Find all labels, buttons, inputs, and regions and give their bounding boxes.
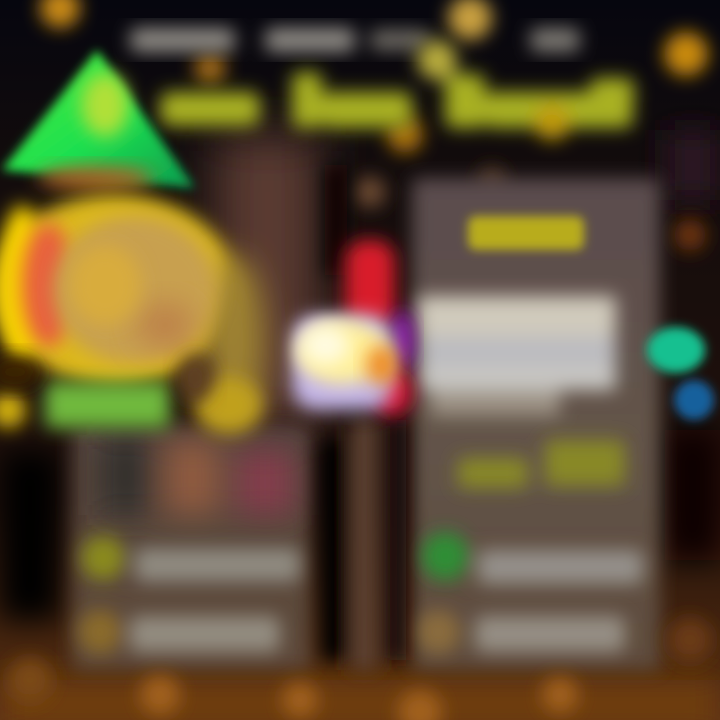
yellow-white glow <box>296 320 388 384</box>
left panel row 1: icon and text <box>81 536 300 582</box>
left panel upper columns <box>100 435 295 515</box>
icon: green triangle roof <box>2 50 195 190</box>
emblem base: green block <box>45 382 170 428</box>
right panel olive text <box>458 440 625 488</box>
panel: right main <box>412 178 660 670</box>
right panel white text block <box>418 296 616 416</box>
bottom bokeh strip <box>8 618 712 720</box>
decorative bokeh lights <box>0 0 708 428</box>
emblem left shadow <box>0 356 41 388</box>
orange glow <box>366 345 398 385</box>
purple edge glow <box>390 310 414 370</box>
violet-white base <box>292 315 392 410</box>
red blob <box>345 240 395 330</box>
title: small upper line (illegible in reference) <box>130 28 580 52</box>
panel: left lower <box>72 425 310 670</box>
right panel heading <box>468 216 584 250</box>
emblem foot: yellow <box>194 377 262 433</box>
magenta-red glow <box>372 368 412 416</box>
emblem shadow <box>177 354 213 402</box>
left panel row 2: icon and text <box>78 610 280 654</box>
white highlight <box>301 325 349 365</box>
center column <box>292 165 414 670</box>
right panel row 2: icon and text <box>416 610 625 654</box>
icon: blue dot <box>674 380 714 420</box>
title: large yellow-green line (illegible in reference) <box>160 40 634 140</box>
right panel row 1: icon and text <box>421 532 643 584</box>
icon: teal dot <box>647 327 705 373</box>
icon: yellow circular emblem <box>0 194 265 433</box>
